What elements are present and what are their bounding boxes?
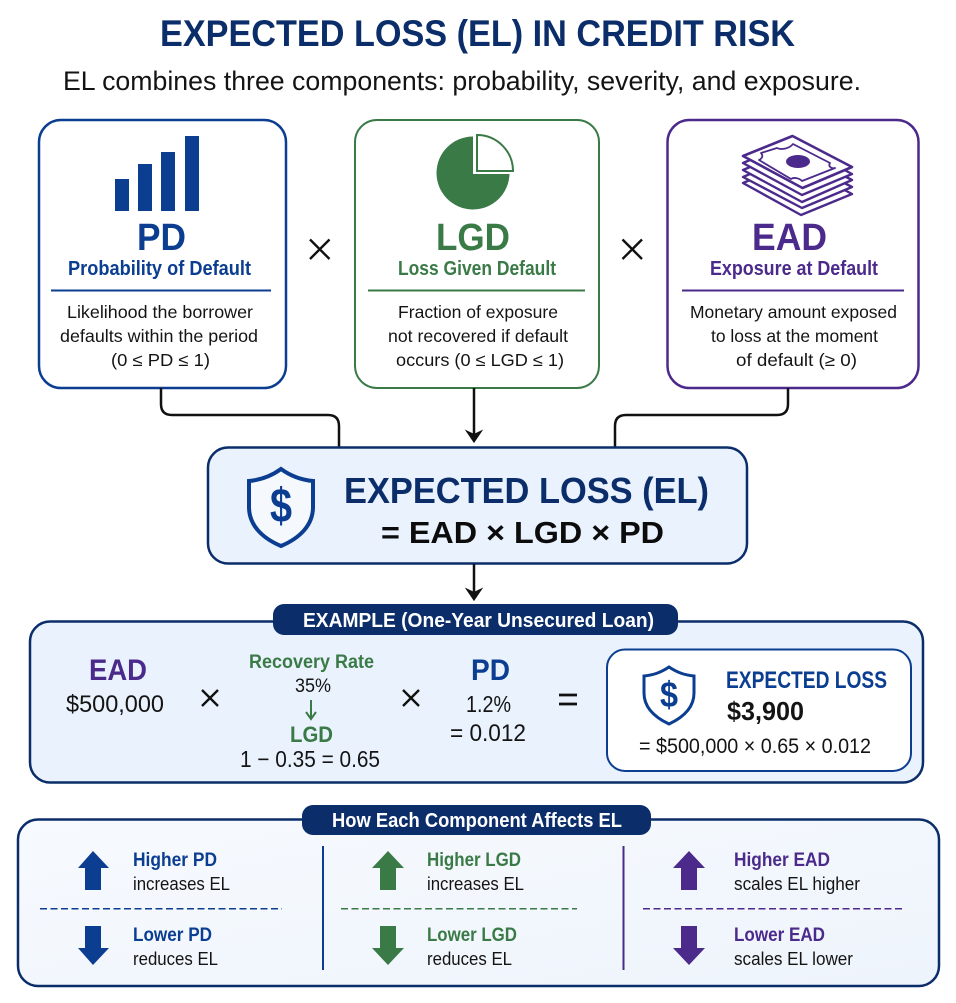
example PD: = 0.012	[450, 720, 526, 747]
badge: effects: How Each Component Affects EL	[332, 810, 622, 832]
title: EXPECTED LOSS (EL) IN CREDIT RISK	[160, 13, 795, 54]
example EAD	[66, 654, 164, 718]
EAD heading: EAD	[752, 217, 827, 259]
LGD subheading: Loss Given Default	[398, 258, 556, 280]
column: LGD effects: increases EL	[427, 874, 524, 894]
column: LGD effects: Higher LGD	[427, 850, 521, 871]
EL heading: EXPECTED LOSS (EL)	[344, 470, 709, 511]
column: PD effects: increases EL	[133, 874, 230, 894]
arrow: LGD to EL	[466, 388, 482, 442]
PD description: (0 ≤ PD ≤ 1)	[111, 350, 210, 370]
PD description: defaults within the period	[60, 326, 258, 346]
expected loss calculation: = $500,000 × 0.65 × 0.012	[639, 735, 871, 758]
multiply sign	[403, 690, 419, 706]
EAD description: of default (≥ 0)	[736, 350, 857, 370]
LGD description: not recovered if default	[388, 326, 568, 346]
column: PD effects: Higher PD	[133, 850, 217, 871]
panel: LGD	[355, 120, 599, 388]
PD description: Likelihood the borrower	[67, 302, 253, 322]
column: PD effects: reduces EL	[133, 949, 218, 969]
icon: bar chart	[115, 136, 199, 211]
multiply sign 1	[310, 240, 330, 259]
PD heading: PD	[137, 217, 186, 259]
PD description	[60, 302, 258, 370]
panel: PD	[39, 120, 286, 388]
icon: down arrow	[78, 926, 109, 965]
example EAD: $500,000	[66, 691, 164, 718]
icon: pie chart	[437, 135, 513, 210]
icon: shield	[249, 469, 313, 546]
arrow: EL to example	[466, 564, 482, 600]
multiply sign 2	[622, 240, 642, 259]
equals sign	[559, 695, 577, 704]
example PD: 1.2%	[466, 691, 511, 717]
example LGD	[240, 652, 380, 772]
column: EAD effects: Higher EAD	[734, 850, 830, 871]
badge: example	[273, 604, 678, 635]
example PD: PD	[471, 654, 510, 687]
panel: expected loss formula	[208, 448, 747, 564]
example LGD: 35%	[295, 675, 331, 697]
badge: effects	[302, 805, 651, 835]
column: EAD effects: scales EL lower	[734, 949, 853, 969]
icon: shield: $	[660, 674, 678, 715]
EL formula: = EAD × LGD × PD	[381, 515, 664, 550]
column: LGD effects: Lower LGD	[427, 925, 517, 946]
multiply sign	[202, 690, 218, 706]
column: EAD effects: scales EL higher	[734, 874, 860, 894]
subtitle: EL combines three components: probability, severity, and exposure.	[63, 66, 861, 96]
example LGD: 1 − 0.35 = 0.65	[240, 746, 380, 772]
connector: EAD to EL	[615, 388, 788, 447]
LGD description: Fraction of exposure	[398, 302, 558, 322]
column: EAD effects	[643, 850, 902, 969]
icon: shield: $	[270, 480, 292, 533]
EAD description	[690, 302, 897, 370]
example PD	[450, 654, 526, 747]
icon: stack of money	[743, 136, 852, 215]
LGD description	[388, 302, 568, 370]
EAD description: Monetary amount exposed	[690, 302, 897, 322]
EAD subheading: Exposure at Default	[710, 258, 878, 280]
column: LGD effects	[341, 850, 577, 969]
PD subheading: Probability of Default	[68, 258, 251, 280]
connector: PD to EL	[161, 388, 339, 447]
icon: down arrow	[372, 926, 404, 965]
icon: up arrow	[372, 851, 404, 890]
column: PD effects	[40, 850, 282, 969]
icon: up arrow	[78, 851, 109, 890]
example EAD: EAD	[89, 654, 147, 687]
icon: up arrow	[673, 851, 705, 890]
column: LGD effects: reduces EL	[427, 949, 512, 969]
expected loss value: $3,900	[727, 696, 804, 726]
icon: down arrow	[673, 926, 705, 965]
icon: shield	[644, 667, 694, 724]
example LGD: Recovery Rate	[249, 652, 374, 673]
example LGD: LGD	[290, 722, 333, 747]
panel: example	[30, 604, 923, 782]
LGD heading: LGD	[436, 217, 510, 259]
expected loss label: EXPECTED LOSS	[726, 667, 887, 694]
column: EAD effects: Lower EAD	[734, 925, 825, 946]
panel: how each component affects EL	[18, 805, 939, 986]
badge: example: EXAMPLE (One-Year Unsecured Loan)	[303, 610, 654, 632]
EAD description: to loss at the moment	[711, 326, 878, 346]
result box	[607, 650, 911, 771]
column: PD effects: Lower PD	[133, 925, 212, 946]
LGD description: occurs (0 ≤ LGD ≤ 1)	[396, 350, 564, 370]
panel: EAD	[668, 120, 918, 388]
